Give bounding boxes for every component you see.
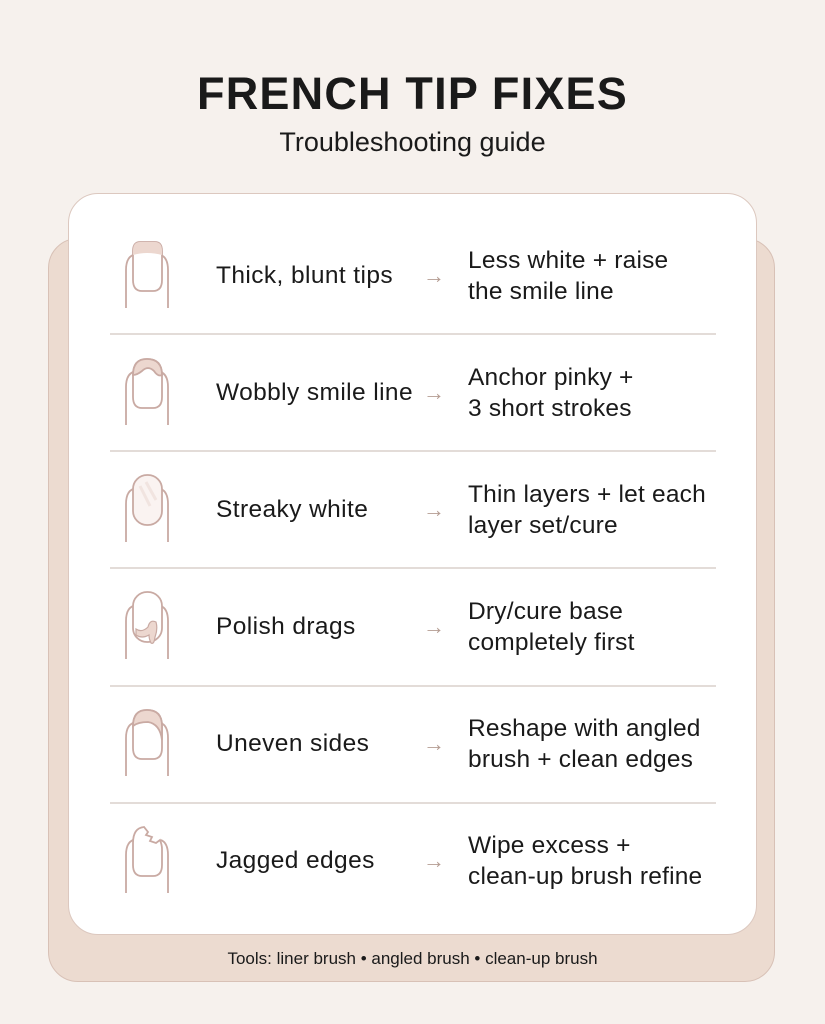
row: polish drags: completely first [468,628,635,656]
main card [68,193,757,935]
row: uneven sides: Uneven sides [216,730,369,756]
subtitle: Troubleshooting guide [279,127,546,157]
row: streaky white: → [423,496,445,522]
row: thick blunt tips: → [423,262,445,288]
icon: jagged nail [125,826,169,893]
row: uneven sides: Reshape with angled [468,714,701,742]
row: thick blunt tips: Thick, blunt tips [216,262,393,288]
row: polish drags: Dry/cure base [468,598,623,624]
row: wobbly smile line: 3 short strokes [468,394,632,422]
row: polish drags [125,591,635,659]
row: jagged edges: clean-up brush refine [468,862,702,890]
row: jagged edges: Wipe excess + [468,832,631,858]
row: thick blunt tips: the smile line [468,278,614,304]
icon: blunt tip nail [125,241,169,308]
icon: uneven nail [125,709,169,776]
row: jagged edges: → [423,848,445,872]
row: wobbly smile line: Anchor pinky + [468,364,634,390]
row: streaky white: Thin layers + let each [468,480,706,508]
row: wobbly smile line: Wobbly smile line [216,378,413,406]
row: jagged edges [125,826,702,893]
row: jagged edges: Jagged edges [216,846,375,874]
row: uneven sides [125,709,701,776]
row: uneven sides: brush + clean edges [468,746,693,772]
row: polish drags: Polish drags [216,612,356,640]
row: streaky white: Streaky white [216,496,368,522]
title: FRENCH TIP FIXES [197,68,628,119]
row: wobbly smile line: → [423,380,445,404]
row: thick blunt tips [125,241,668,308]
icon: dragging polish nail [125,591,169,659]
row: streaky white [125,474,706,542]
footer: tools: Tools: liner brush • angled brush • clean-up brush [227,949,598,968]
row: streaky white: layer set/cure [468,512,618,538]
back panel [48,238,775,982]
icon: wobbly nail [125,358,169,425]
icon: streaky nail [125,474,169,542]
row: polish drags: → [423,614,445,638]
row: thick blunt tips: Less white + raise [468,246,668,274]
row: uneven sides: → [423,730,445,756]
row: wobbly smile line [125,358,634,425]
